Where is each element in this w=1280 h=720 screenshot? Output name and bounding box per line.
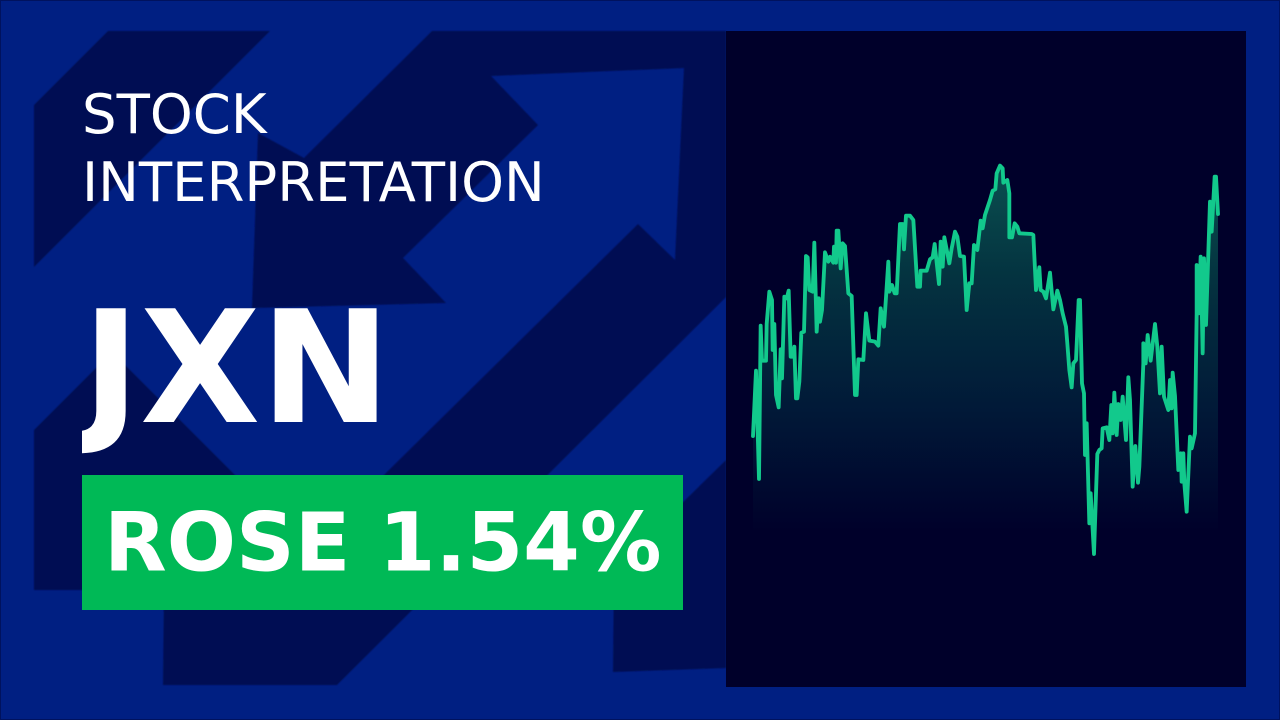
title: [82, 82, 545, 214]
title: STOCK: [82, 82, 268, 146]
change badge: ROSE 1.54%: [104, 496, 662, 590]
background arrows: [34, 31, 726, 685]
change badge: [82, 475, 683, 610]
price line: [753, 166, 1218, 554]
title: INTERPRETATION: [82, 150, 545, 214]
area fill: [753, 166, 1218, 554]
ticker: JXN: [73, 277, 391, 459]
line chart: [753, 166, 1218, 554]
chart panel: [726, 31, 1246, 687]
